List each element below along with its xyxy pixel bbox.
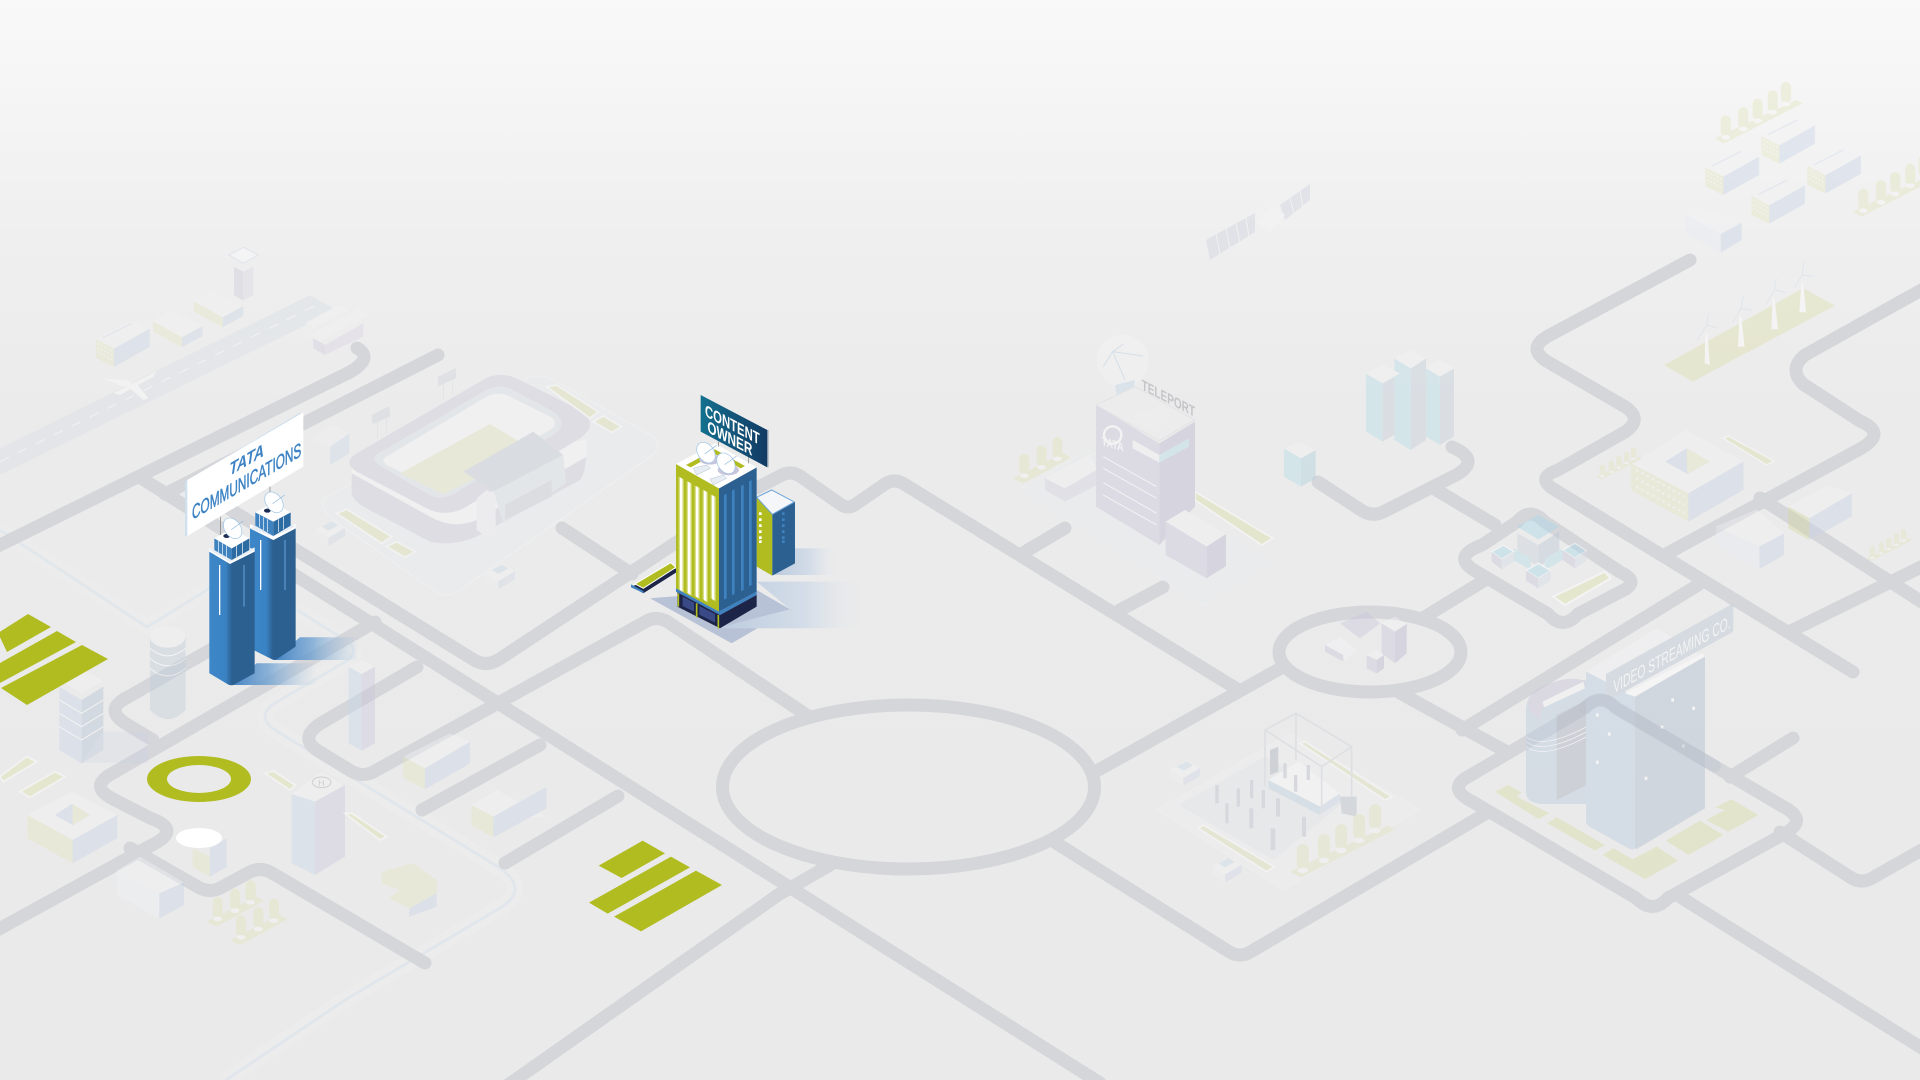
teleport building [1013, 335, 1454, 605]
narrow tower [349, 660, 375, 751]
road network [0, 260, 1920, 1080]
stadium grounds [323, 376, 658, 595]
performers and audience [1215, 763, 1310, 850]
small office [117, 857, 184, 918]
service vans [315, 521, 515, 589]
video streaming campus [1495, 603, 1758, 879]
grey office [1685, 207, 1742, 253]
vans [1170, 761, 1242, 883]
green ring [147, 756, 251, 802]
data pods [1492, 543, 1587, 588]
four offices [1705, 118, 1861, 224]
floodlights [372, 368, 456, 438]
stadium [310, 368, 658, 595]
helipad tower: H [318, 778, 325, 788]
venue ground [1157, 733, 1420, 890]
airplane [103, 372, 157, 400]
helipad tower [292, 772, 345, 875]
beige lot panels [1495, 785, 1758, 879]
grey office [1716, 509, 1784, 569]
ellipse buildings [1325, 612, 1407, 673]
courtyard building [1631, 430, 1743, 522]
office block [96, 321, 150, 367]
front annex [1166, 510, 1226, 578]
right campus buildings [1597, 430, 1912, 569]
beige strip [1723, 436, 1774, 465]
runway [0, 295, 337, 475]
second office near road [472, 787, 547, 837]
sign: tata communications: TATA [229, 440, 264, 481]
upper right office campus [1664, 82, 1920, 382]
small teal box [1284, 442, 1316, 487]
stadium side strips [337, 385, 622, 557]
hangars [153, 290, 243, 347]
cylinder [150, 626, 186, 719]
small tree rows [1597, 447, 1912, 561]
tata logo mark: TATA [1102, 434, 1124, 455]
sign: tata communications: COMMUNICATIONS [192, 437, 301, 525]
rear tower [250, 487, 296, 660]
ghost buildings lower left [0, 626, 547, 945]
striped tower [59, 668, 148, 763]
main tower [1586, 628, 1705, 849]
sign: content owner: CONTENT [705, 401, 760, 449]
stage [1268, 747, 1357, 817]
tree row [1290, 804, 1395, 878]
side annex [757, 490, 795, 576]
small building by ellipse [193, 838, 227, 877]
sign: video streaming co. [1606, 603, 1733, 702]
tata communications building [185, 412, 360, 685]
office with green face [1788, 485, 1852, 540]
cylinder building [1526, 679, 1587, 804]
satellite [1206, 184, 1310, 260]
terminal [305, 305, 368, 355]
central data block [1513, 515, 1563, 570]
green parking strips centre [589, 841, 722, 931]
teal tower cluster [1366, 350, 1454, 450]
sign: tata communications [185, 412, 303, 537]
beige strips [0, 757, 387, 840]
office near road [403, 733, 470, 789]
sign: teleport: TELEPORT [1142, 377, 1195, 421]
stadium body [349, 375, 590, 543]
tree row [1013, 437, 1071, 483]
teleport grounds [1018, 450, 1273, 605]
courtyard building [27, 792, 117, 863]
control tower [229, 247, 258, 301]
tree rows [207, 880, 287, 945]
road overlay across streaming tower [1585, 700, 1715, 766]
content owner building [631, 395, 863, 643]
beige strip [1553, 572, 1611, 605]
crowd floor [1178, 757, 1347, 860]
teleport dish [1097, 335, 1149, 403]
sign: content owner: OWNER [707, 417, 752, 460]
airport [0, 247, 368, 475]
building shadows [650, 548, 863, 643]
tower shadows [230, 637, 360, 685]
green parking strips left [0, 614, 108, 705]
front tower [209, 514, 255, 685]
entrance booth [310, 425, 349, 465]
wind farm [1664, 262, 1835, 382]
sign: content owner [701, 395, 769, 467]
low rounded building [382, 863, 437, 917]
stage truss [1265, 713, 1352, 813]
pale rail line [0, 530, 515, 1080]
white ellipse pad [176, 828, 222, 848]
data centre on loop [1325, 515, 1611, 673]
concert venue [1157, 713, 1420, 890]
sign: video streaming co.: VIDEO STREAMING CO. [1613, 612, 1731, 698]
main teleport block [1096, 387, 1195, 545]
tree rows [1715, 82, 1920, 217]
main tower [676, 439, 757, 628]
beige strip [1195, 492, 1273, 545]
beige strips [1198, 742, 1392, 872]
low annex [1045, 453, 1097, 502]
tata logo mark [1102, 426, 1124, 455]
green entrance strip [631, 563, 676, 593]
